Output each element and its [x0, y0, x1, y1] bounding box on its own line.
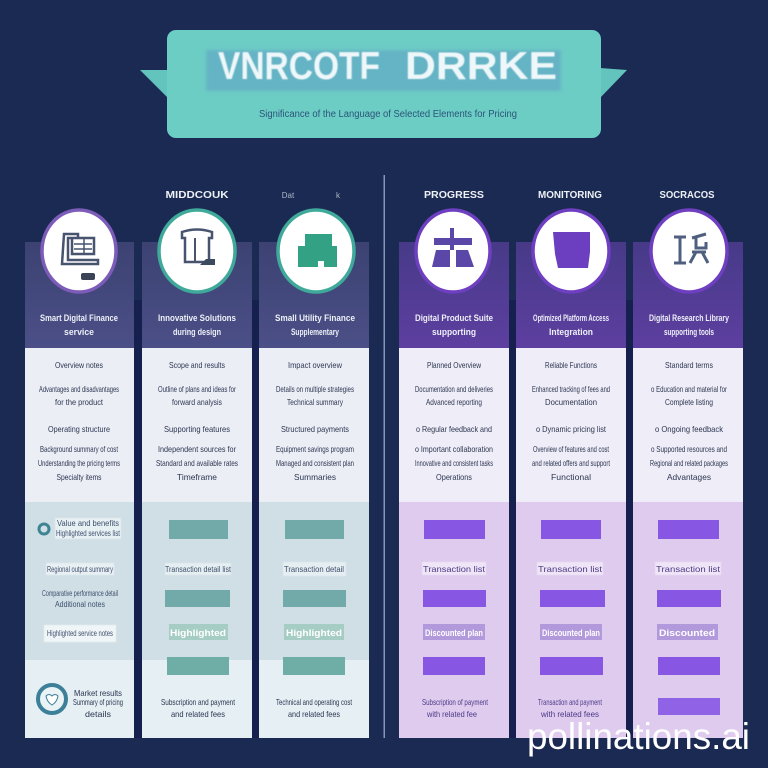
footer text: details	[85, 709, 111, 719]
column label	[282, 191, 341, 200]
body text	[156, 360, 238, 482]
center divider	[384, 175, 385, 738]
footer text: Subscription and payment	[161, 697, 235, 707]
body text: forward analysis	[172, 397, 222, 407]
column heading	[158, 313, 236, 337]
column heading	[533, 313, 609, 337]
body text	[38, 360, 120, 482]
body text: o Supported resources and	[651, 444, 727, 454]
body text: Advantages	[667, 472, 711, 482]
lower rows: Transaction list	[538, 564, 603, 574]
body text: Planned Overview	[427, 360, 482, 370]
lower rows: Transaction detail	[284, 565, 344, 574]
body text: Operations	[436, 472, 472, 482]
body text: Understanding the pricing terms	[38, 458, 120, 468]
column heading: Supplementary	[291, 327, 339, 337]
column label: MONITORING	[538, 190, 602, 201]
lower rows	[422, 520, 486, 675]
footer text: Subscription of payment	[422, 697, 488, 707]
column 4	[399, 190, 509, 738]
title banner	[140, 30, 627, 138]
column label: k	[336, 191, 341, 200]
body text: Reliable Functions	[545, 360, 597, 370]
body text: Enhanced tracking of fees and	[532, 384, 610, 394]
body text: Advanced reporting	[426, 397, 482, 407]
column heading: supporting	[432, 327, 476, 337]
column heading: Optimized Platform Access	[533, 313, 609, 323]
footer text: with related fee	[426, 709, 477, 719]
footer text: Transaction and payment	[538, 697, 602, 707]
body text: o Ongoing feedback	[655, 424, 724, 434]
body text: Outline of plans and ideas for	[158, 384, 236, 394]
icon: document	[42, 210, 116, 292]
body text	[532, 360, 610, 482]
body text: Impact overview	[288, 360, 343, 370]
body text	[415, 360, 493, 482]
lower rows: Value and benefits	[57, 519, 119, 528]
column label: Dat	[282, 191, 295, 200]
body text: Technical summary	[287, 397, 344, 407]
body text: for the product	[55, 397, 104, 407]
body text: Independent sources for	[158, 444, 236, 454]
footer text: with related fees	[540, 709, 599, 719]
footer text	[422, 697, 488, 719]
body text: Specialty items	[56, 472, 102, 482]
footer text: Technical and operating cost	[276, 697, 352, 707]
lower rows	[283, 520, 346, 675]
lower rows: Transaction list	[423, 564, 486, 574]
column heading: Digital Research Library	[649, 313, 729, 323]
footer text: Summary of pricing	[73, 697, 123, 707]
icon: book stack	[159, 210, 235, 292]
column heading: Smart Digital Finance	[40, 313, 118, 323]
column heading	[649, 313, 729, 337]
footer text	[276, 697, 352, 719]
subtitle: Significance of the Language of Selected Elements for Pricing	[259, 109, 517, 120]
body text: Standard and available rates	[156, 458, 238, 468]
lower rows: Discounted	[659, 628, 715, 638]
body text: Managed and consistent plan	[276, 458, 354, 468]
watermark: pollinations.ai	[527, 716, 750, 757]
body text: Operating structure	[48, 424, 110, 434]
title	[218, 45, 557, 88]
body text: Equipment savings program	[276, 444, 354, 454]
column 1	[25, 210, 134, 738]
body text: Summaries	[294, 472, 336, 482]
column label: MIDDCOUK	[166, 190, 229, 201]
body text: Advantages and disadvantages	[39, 384, 119, 394]
body text: o Important collaboration	[415, 444, 493, 454]
lower rows: Comparative performance detail	[42, 589, 118, 598]
footer text	[538, 697, 602, 719]
body text: Innovative and consistent tasks	[415, 458, 493, 468]
lower rows: Discounted plan	[542, 628, 600, 638]
title: VNRCOTF	[218, 45, 380, 88]
footer text	[161, 697, 235, 719]
lower rows	[165, 520, 232, 675]
column label: SOCRACOS	[660, 190, 715, 201]
column heading	[40, 313, 118, 337]
footer text: Market results	[74, 688, 122, 698]
body text: o Education and material for	[651, 384, 727, 394]
body text: Scope and results	[169, 360, 225, 370]
column heading: Small Utility Finance	[275, 313, 355, 323]
body text: Timeframe	[177, 472, 217, 482]
body text: Structured payments	[281, 424, 349, 434]
body text: Supporting features	[164, 424, 230, 434]
body text	[650, 360, 728, 482]
body text: Background summary of cost	[40, 444, 118, 454]
lower rows: Highlighted service notes	[47, 629, 113, 638]
lower rows: Regional output summary	[47, 565, 113, 574]
icon: purple tools	[416, 210, 490, 292]
lower rows	[537, 520, 605, 675]
lower rows	[655, 520, 721, 715]
body text: Regional and related packages	[650, 458, 728, 468]
column label: PROGRESS	[424, 190, 484, 201]
body text	[276, 360, 354, 482]
column 3	[259, 191, 369, 738]
footer text	[73, 688, 123, 719]
lower rows: Highlighted services list	[56, 529, 121, 538]
footer text: and related fees	[171, 709, 225, 719]
icon: green building	[278, 210, 354, 292]
body text: o Dynamic pricing list	[536, 424, 607, 434]
lower rows: Additional notes	[55, 600, 105, 609]
column 2	[142, 190, 252, 738]
footer text: and related fees	[288, 709, 340, 719]
body text: Complete listing	[665, 397, 713, 407]
icon: badge	[38, 685, 66, 713]
body text: Overview of features and cost	[533, 444, 609, 454]
column heading: Digital Product Suite	[415, 313, 493, 323]
body text: Documentation	[545, 397, 597, 407]
lower rows	[39, 518, 121, 642]
lower rows: Highlighted	[286, 628, 342, 638]
icon: tool grid	[651, 210, 727, 292]
title: DRRKE	[405, 45, 557, 88]
column heading: Integration	[549, 327, 593, 337]
lower rows: Transaction list	[656, 564, 721, 574]
body text: Details on multiple strategies	[276, 384, 354, 394]
lower rows: Highlighted	[170, 628, 226, 638]
column 5	[516, 190, 626, 738]
icon: purple box	[533, 210, 609, 292]
body text: Documentation and deliveries	[415, 384, 493, 394]
body text: Overview notes	[55, 360, 103, 370]
column heading	[415, 313, 493, 337]
column heading: during design	[173, 327, 221, 337]
lower rows: Discounted plan	[425, 628, 483, 638]
body text: o Regular feedback and	[416, 424, 492, 434]
column heading: Innovative Solutions	[158, 313, 236, 323]
column 6	[633, 190, 743, 738]
column heading: supporting tools	[664, 327, 714, 337]
body text: and related offers and support	[532, 458, 610, 468]
lower rows: Transaction detail list	[165, 565, 232, 574]
column heading: service	[64, 327, 94, 337]
body text: Standard terms	[665, 360, 713, 370]
body text: Functional	[551, 472, 591, 482]
column heading	[275, 313, 355, 337]
